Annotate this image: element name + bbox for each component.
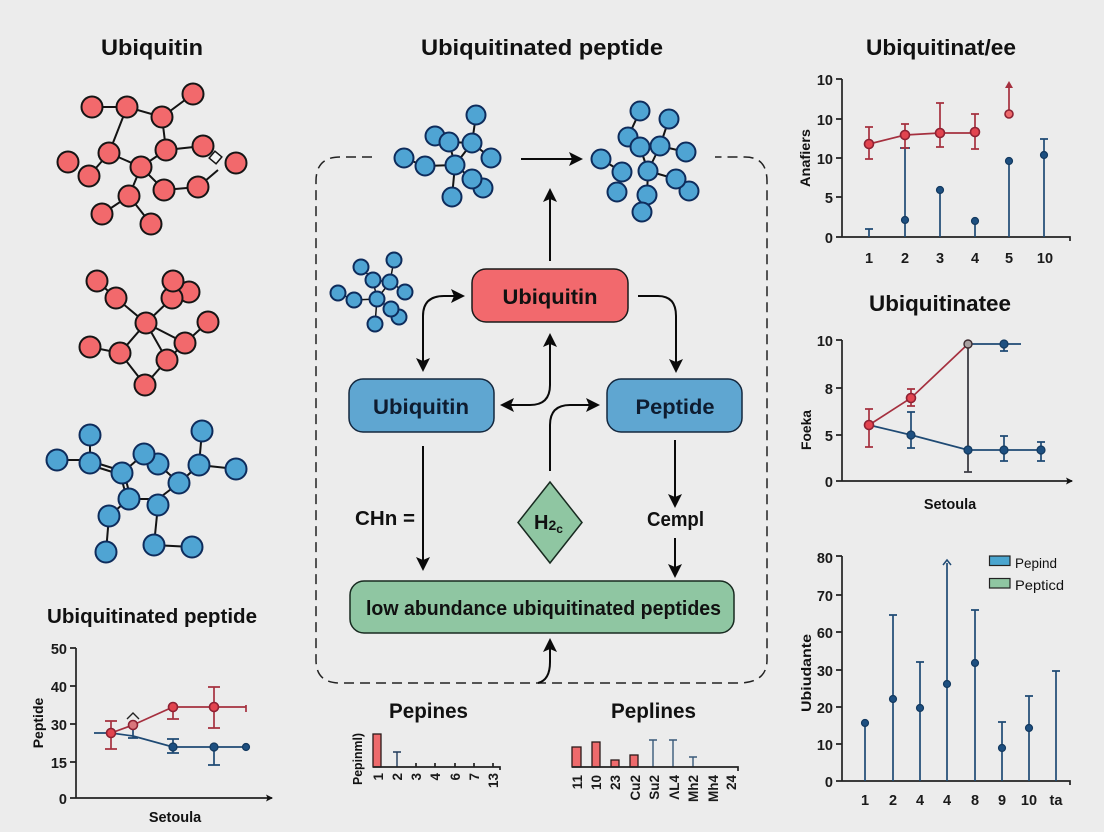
box: Ubiquitin red xyxy=(472,269,628,322)
red series xyxy=(864,340,972,447)
y tick labels: 0 xyxy=(825,475,833,491)
x axis label: Setoula xyxy=(924,497,977,513)
y tick labels: 0 xyxy=(825,231,833,247)
molecule: red ubiquitin top xyxy=(58,84,246,234)
arrow: frame up to green box xyxy=(538,640,550,683)
axis xyxy=(572,767,738,771)
y tick labels: 8 xyxy=(825,382,833,398)
arrow: blue box down to green box xyxy=(422,446,424,569)
molecule: blue ubiquitin xyxy=(46,420,246,562)
x tick labels: 4 xyxy=(943,793,951,809)
legend: Pepind xyxy=(1015,555,1057,571)
tick labels: 24 xyxy=(724,775,739,790)
panel: bottom-right chart xyxy=(798,551,1070,809)
bar xyxy=(373,734,381,767)
stems xyxy=(865,563,1060,781)
tick labels: 4 xyxy=(428,773,443,781)
heading: Pepines xyxy=(389,700,468,723)
arrow: left molecule to right molecule xyxy=(521,158,581,160)
box: Peptide blue xyxy=(607,379,742,432)
x tick labels: 4 xyxy=(971,251,979,267)
y tick labels: 10 xyxy=(817,152,833,168)
box: low abundance ubiquitinated peptides xyxy=(350,581,734,633)
label: CHn =: CHn = xyxy=(355,508,415,530)
x tick labels: 4 xyxy=(916,793,924,809)
box: Ubiquitin blue: Ubiquitin xyxy=(373,396,469,419)
y tick labels: 20 xyxy=(817,701,833,717)
title: Ubiquitin: Ubiquitin xyxy=(101,35,203,60)
blue stems xyxy=(865,139,1048,237)
y tick labels: 10 xyxy=(817,113,833,129)
box: low abundance ubiquitinated peptides: low abundance ubiquitinated peptides xyxy=(366,598,721,620)
x tick labels xyxy=(865,251,1053,267)
box: Ubiquitin red: Ubiquitin xyxy=(502,286,598,309)
tick labels: ΛL4 xyxy=(667,775,682,800)
x tick labels: 9 xyxy=(998,793,1006,809)
x tick labels: ta xyxy=(1050,793,1063,809)
arrow: blue box to red box xyxy=(423,296,463,370)
y axis label: Peptide xyxy=(30,698,46,748)
panel: small bar chart Peplines xyxy=(570,700,739,802)
legend xyxy=(990,555,1064,593)
tick labels: 23 xyxy=(608,775,623,790)
red series xyxy=(105,687,246,749)
box: Ubiquitin blue xyxy=(349,379,494,432)
box: Peptide blue: Peptide xyxy=(636,396,714,419)
molecule: blue peptide left xyxy=(394,106,500,206)
tick labels: 2 xyxy=(390,773,405,781)
diamond: H2c xyxy=(518,482,582,563)
arrow tip xyxy=(943,560,951,565)
tick labels xyxy=(570,775,739,802)
y tick labels: 50 xyxy=(51,642,67,658)
x tick labels: 10 xyxy=(1021,793,1037,809)
y tick labels xyxy=(817,551,833,791)
diamond: H2c: c xyxy=(556,522,563,536)
y axis label: Foeka xyxy=(798,410,814,450)
y tick labels: 5 xyxy=(825,429,833,445)
panel: bottom-left line chart xyxy=(30,605,272,826)
x tick labels: 5 xyxy=(1005,251,1013,267)
tick labels: 1 xyxy=(371,773,386,781)
diamond: H2c: H xyxy=(534,512,548,534)
y tick labels: 0 xyxy=(59,792,67,808)
y tick labels: 10 xyxy=(817,738,833,754)
y tick labels: 10 xyxy=(817,334,833,350)
molecule: small blue peptide xyxy=(330,252,412,332)
y tick labels: 80 xyxy=(817,551,833,567)
arrow: red box to peptide box xyxy=(638,296,676,371)
x tick labels: 2 xyxy=(889,793,897,809)
arrow: red box up to molecules xyxy=(549,190,551,261)
axes xyxy=(836,79,1070,241)
panel: small bar chart Pepines xyxy=(350,700,501,788)
heading: Ubiquitinat/ee xyxy=(866,35,1016,60)
tick labels: Mh2 xyxy=(686,775,701,802)
stem xyxy=(393,752,401,767)
y label: Pepinml) xyxy=(350,733,365,785)
tick labels: Su2 xyxy=(647,775,662,800)
panel: top-right chart xyxy=(797,35,1070,267)
y tick labels: 70 xyxy=(817,589,833,605)
y tick labels: 15 xyxy=(51,756,67,772)
dots xyxy=(862,660,1032,752)
stems xyxy=(649,740,697,767)
heading: Ubiquitinated peptide xyxy=(47,605,257,628)
tick labels: 6 xyxy=(448,773,463,781)
axes xyxy=(836,340,842,481)
vertical connector xyxy=(964,344,972,472)
y tick labels xyxy=(817,73,833,247)
x tick labels: 1 xyxy=(865,251,873,267)
red series xyxy=(864,81,1013,159)
y tick labels xyxy=(51,642,67,808)
x tick labels: 3 xyxy=(936,251,944,267)
x axis arrow xyxy=(836,480,1072,482)
dashed process frame xyxy=(316,157,767,683)
arrow: diamond to peptide box xyxy=(550,405,598,471)
title: Ubiquitinated peptide: Ubiquitinated peptide xyxy=(421,35,663,60)
arrow: peptide box down xyxy=(674,440,676,506)
heading: Ubiquitinatee xyxy=(869,291,1011,316)
axes xyxy=(70,648,76,798)
y axis label: Ubiudante xyxy=(798,634,814,712)
x tick labels: 10 xyxy=(1037,251,1053,267)
x tick labels xyxy=(861,793,1063,809)
y tick labels: 10 xyxy=(817,73,833,89)
tick labels: 10 xyxy=(589,775,604,790)
molecule: blue peptide right xyxy=(592,102,698,222)
arrow: central two-way connector xyxy=(502,335,550,405)
tick labels xyxy=(371,773,501,788)
bars xyxy=(572,742,638,767)
y tick labels: 30 xyxy=(51,718,67,734)
tick labels: Mh4 xyxy=(706,775,721,802)
x tick labels: 2 xyxy=(901,251,909,267)
tick labels: 13 xyxy=(486,773,501,788)
x axis label: Setoula xyxy=(149,810,202,826)
panel: middle-right chart xyxy=(798,291,1072,513)
x tick labels: 1 xyxy=(861,793,869,809)
diamond: H2c: 2 xyxy=(548,517,556,533)
tick labels: Cu2 xyxy=(628,775,643,801)
axis xyxy=(373,763,500,770)
arrow: Cempl down to green box xyxy=(674,538,676,576)
y tick labels: 60 xyxy=(817,626,833,642)
heading: Peplines xyxy=(611,700,696,723)
tick labels: 3 xyxy=(409,773,424,781)
y tick labels: 0 xyxy=(825,775,833,791)
y tick labels: 30 xyxy=(817,664,833,680)
tick labels: 11 xyxy=(570,775,585,789)
x axis arrow xyxy=(70,797,272,799)
blue series xyxy=(94,725,250,765)
blue series xyxy=(869,340,1045,461)
axes xyxy=(836,556,1070,785)
tick labels: 7 xyxy=(467,773,482,781)
molecule: red ubiquitin middle xyxy=(80,270,218,396)
legend: Pepticd xyxy=(1015,577,1064,593)
y tick labels xyxy=(817,334,833,491)
y axis label: Anafiers xyxy=(797,129,813,187)
label: Cempl: Cempl xyxy=(647,509,704,531)
y tick labels: 40 xyxy=(51,680,67,696)
x tick labels: 8 xyxy=(971,793,979,809)
y tick labels: 5 xyxy=(825,191,833,207)
